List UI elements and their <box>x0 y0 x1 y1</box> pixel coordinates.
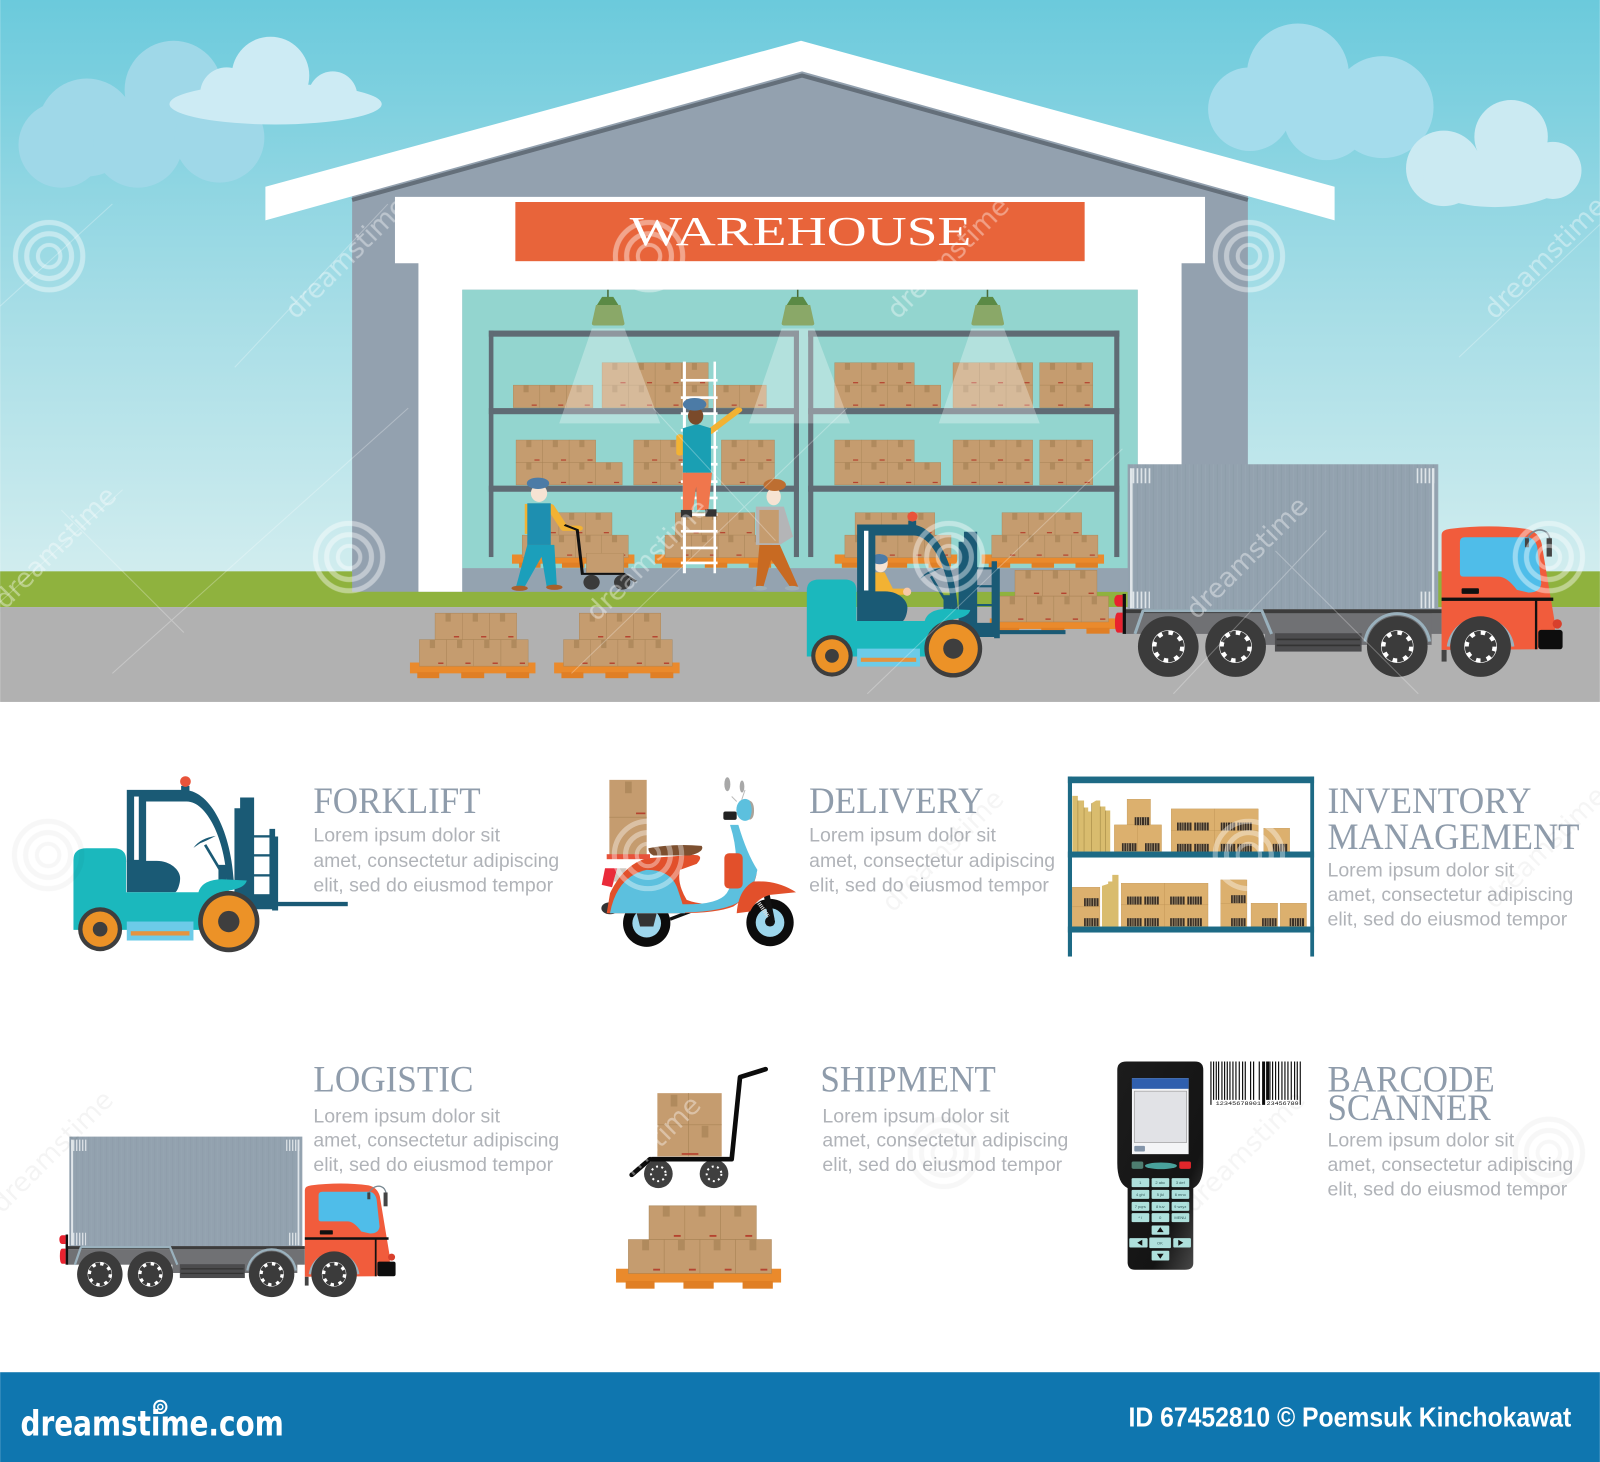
lamps <box>592 290 1004 325</box>
cloud: left small <box>169 37 382 124</box>
barcode: 23456789 <box>1267 1101 1299 1107</box>
watermark on white area <box>0 780 1600 1224</box>
icon: hand truck with box <box>632 1069 766 1188</box>
text: inventory management <box>1327 859 1573 930</box>
icon: truck <box>59 1137 396 1297</box>
text: barcode scanner: Lorem ipsum dolor sit <box>1327 1130 1515 1152</box>
icon: scanner: 0 <box>1159 1215 1162 1220</box>
icon: scanner: 9 wxyz <box>1174 1204 1186 1209</box>
watermark <box>0 191 1600 694</box>
text: inventory management: Lorem ipsum dolor sit <box>1327 859 1515 881</box>
barcode <box>1211 1061 1300 1107</box>
sign: WAREHOUSE <box>630 209 971 254</box>
hand truck <box>565 525 636 590</box>
carrying worker <box>753 479 799 591</box>
text: forklift <box>313 825 559 897</box>
icon: pallet of boxes <box>616 1206 781 1289</box>
grass <box>0 571 1600 607</box>
cloud: right large <box>1208 23 1434 160</box>
heading: logistic: LOGISTIC <box>313 1059 474 1100</box>
text: shipment: Lorem ipsum dolor sit <box>822 1105 1010 1127</box>
warehouse building <box>265 41 1335 592</box>
workers, ladder and hand truck <box>511 362 799 591</box>
panel: logistic <box>59 1059 559 1297</box>
heading: shipment: SHIPMENT <box>820 1059 996 1100</box>
heading: forklift: FORKLIFT <box>313 780 481 821</box>
floor <box>462 568 1138 592</box>
watermark on white area: dreamstime <box>1177 1084 1311 1219</box>
forklift vehicle <box>807 512 1065 678</box>
heading: barcode scanner <box>1327 1059 1495 1128</box>
text: forklift: Lorem ipsum dolor sit <box>313 825 501 847</box>
heading: barcode scanner: SCANNER <box>1327 1087 1491 1128</box>
text: logistic: Lorem ipsum dolor sit <box>313 1105 501 1127</box>
heading: inventory management: INVENTORY <box>1327 780 1532 821</box>
text: delivery: Lorem ipsum dolor sit <box>809 825 996 847</box>
road <box>0 607 1600 702</box>
panel: warehouse scene <box>0 0 1600 702</box>
icon: scanner: 4 ghi <box>1136 1192 1145 1197</box>
pallet on fork <box>990 570 1116 634</box>
door frame <box>395 197 1205 592</box>
text: delivery: elit, sed do eiusmod tempor <box>809 875 1049 897</box>
text: forklift: amet, consectetur adipiscing <box>313 850 559 872</box>
worker with hand truck <box>511 478 579 591</box>
text: logistic <box>313 1105 559 1176</box>
text: barcode scanner: amet, consectetur adipiscing <box>1327 1154 1573 1176</box>
watermark on white area: dreamstime <box>876 784 1010 918</box>
floor pallets <box>512 513 1104 568</box>
icon: scanner: 3 def <box>1176 1180 1186 1185</box>
footer bar <box>0 1372 1600 1462</box>
watermark: dreamstime <box>279 191 414 325</box>
wall <box>352 67 1248 592</box>
watermark: dreamstime <box>1180 491 1314 625</box>
heading: barcode scanner: BARCODE <box>1327 1059 1495 1100</box>
panel: delivery <box>601 777 1055 947</box>
icon: scanner: 7 pqrs <box>1135 1204 1146 1209</box>
light cones <box>559 329 1040 423</box>
heading: inventory management: MANAGEMENT <box>1327 816 1579 857</box>
icon: scanner: * / <box>1138 1215 1143 1220</box>
delivery truck <box>1114 464 1563 677</box>
text: barcode scanner: elit, sed do eiusmod tempor <box>1327 1179 1568 1201</box>
road pallets <box>410 613 680 678</box>
panel: barcode scanner <box>1117 1059 1573 1270</box>
text: shipment <box>822 1105 1068 1176</box>
text: logistic: elit, sed do eiusmod tempor <box>313 1154 554 1176</box>
worker on ladder <box>680 398 738 517</box>
text: forklift: elit, sed do eiusmod tempor <box>313 875 554 897</box>
panel: forklift <box>73 776 559 952</box>
icon: scanner: 6 mno <box>1175 1192 1187 1197</box>
forklift with pallet <box>807 512 1116 678</box>
icon: scanner <box>1117 1061 1300 1270</box>
icon: stocked shelf <box>1068 777 1314 957</box>
heading: inventory management <box>1327 780 1579 857</box>
icon: scanner: 8 tuv <box>1156 1204 1165 1209</box>
panel: inventory management <box>1068 777 1579 957</box>
watermark: dreamstime <box>881 191 1016 325</box>
icon: scanner: 5 jkl <box>1157 1192 1164 1197</box>
watermark on white area: dreamstime <box>573 1090 707 1224</box>
text: barcode scanner <box>1327 1130 1573 1201</box>
watermark: dreamstime <box>580 493 715 627</box>
driver <box>871 554 911 596</box>
roof <box>265 41 1335 220</box>
text: inventory management: amet, consectetur adipiscing <box>1327 884 1573 906</box>
icon: scanner: 2 abc <box>1155 1180 1165 1185</box>
sign <box>515 202 1085 261</box>
panel: shipment <box>616 1059 1068 1289</box>
cloud: left large <box>18 41 264 188</box>
barcode: 12345678901 <box>1216 1101 1261 1107</box>
heading: delivery: DELIVERY <box>809 780 984 821</box>
interior <box>462 290 1138 568</box>
text: shipment: amet, consectetur adipiscing <box>822 1130 1068 1152</box>
icon: scanner: MENU <box>1174 1215 1186 1220</box>
icon: scooter with box <box>601 777 796 947</box>
icon: scanner: OK <box>1157 1240 1163 1245</box>
icon: forklift <box>73 776 348 952</box>
text: shipment: elit, sed do eiusmod tempor <box>822 1154 1063 1176</box>
boxes on shelves <box>513 363 1093 485</box>
text: logistic: amet, consectetur adipiscing <box>313 1130 559 1152</box>
icon: scanner: 1 <box>1139 1180 1142 1185</box>
cloud: right small <box>1406 100 1582 207</box>
sky <box>0 0 1600 612</box>
text: delivery <box>809 825 1055 897</box>
text: inventory management: elit, sed do eiusmod tempor <box>1327 908 1568 930</box>
ladder <box>681 362 718 573</box>
footer logo: dreamstime.com <box>21 1404 284 1444</box>
shelves <box>489 331 1119 557</box>
text: delivery: amet, consectetur adipiscing <box>809 850 1055 872</box>
